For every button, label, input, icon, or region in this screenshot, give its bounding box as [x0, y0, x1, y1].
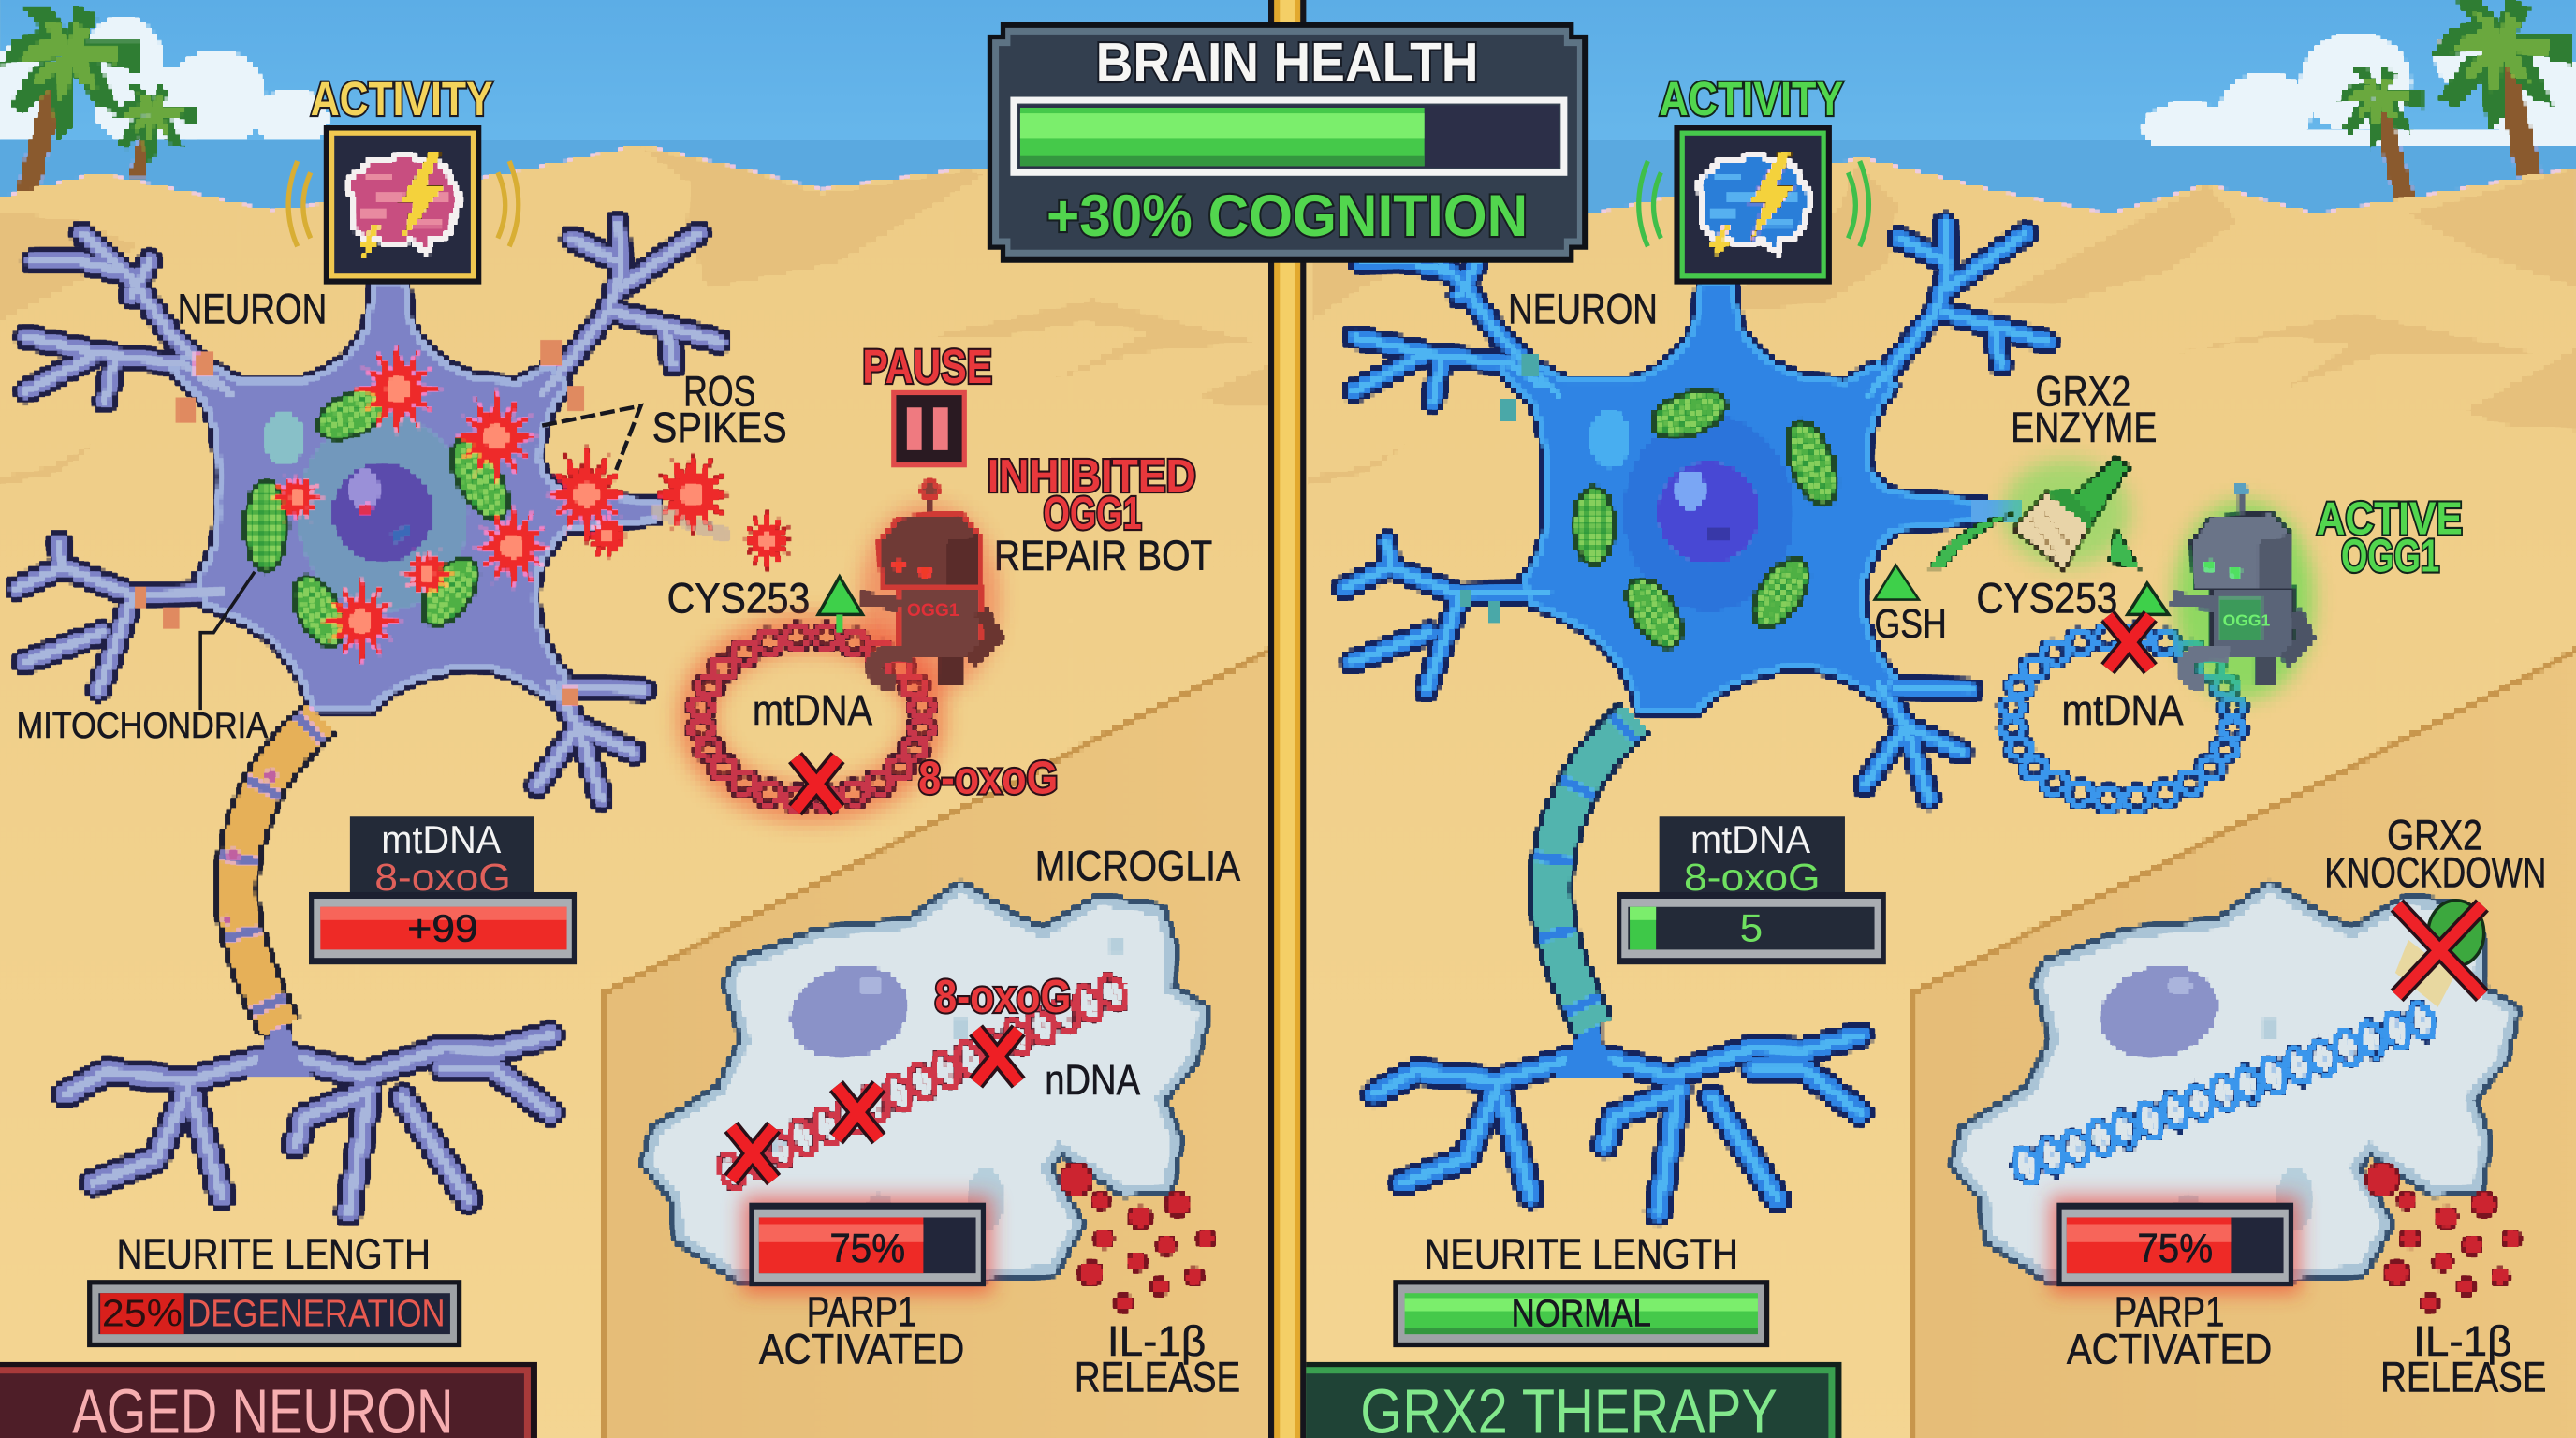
label: 8-oxoG aged mtDNA: 8-oxoG: [918, 754, 1058, 804]
mtDNA ring: therapy: [2000, 625, 2245, 811]
icon: activity aged: [288, 72, 519, 281]
mtDNA ring: aged: [690, 625, 933, 811]
waves therapy: [1639, 161, 1868, 246]
label and bar: neurite length aged: DEGENERATION: [187, 1291, 446, 1334]
spines therapy: [1459, 353, 1540, 621]
chest label: OGG1 therapy: OGG1: [2223, 611, 2271, 630]
DNA strand: nDNA therapy: [2008, 1000, 2440, 1187]
label: repair bot: REPAIR BOT: [994, 532, 1212, 580]
label: active OGG1: OGG1: [2341, 532, 2439, 582]
icon: GSH triangle and label: GSH: [1875, 601, 1947, 647]
mtDNA panel: therapy: mtDNA: [1690, 817, 1810, 861]
palm trees right: [2336, 0, 2571, 207]
label: GRX2 enzyme: [2011, 367, 2157, 451]
brain blue with bolt: [1699, 151, 1809, 259]
label: PARP1 aged: ACTIVATED: [759, 1326, 964, 1373]
label: mtDNA aged: mtDNA: [753, 686, 872, 734]
label and bar: neurite length therapy: NORMAL: [1512, 1291, 1651, 1334]
palm trees left: [0, 5, 196, 191]
damage marks: X on nDNA: [731, 1030, 1018, 1180]
header panel: brain health: [988, 22, 1588, 263]
label: mitochondria: [17, 572, 268, 746]
neuron: aged: [17, 224, 795, 1212]
chest label: OGG1 aged: OGG1: [907, 601, 959, 621]
label: 8-oxoG microglia: 8-oxoG: [935, 972, 1071, 1022]
label: IL-1 beta therapy: IL-1β: [2413, 1317, 2511, 1365]
label: IL-1 beta aged: RELEASE: [1075, 1354, 1240, 1401]
pause icon and label: [862, 340, 992, 465]
mtDNA panel: aged: +99: [407, 907, 478, 950]
label: mitochondria: MITOCHONDRIA: [17, 706, 268, 746]
microglia cell: therapy: [1958, 888, 2511, 1275]
bar: PARP1 therapy: [2050, 1196, 2300, 1293]
nucleus therapy: [1658, 462, 1760, 564]
bar: PARP1 therapy: 75%: [2137, 1225, 2213, 1271]
label: nDNA: nDNA: [1045, 1056, 1141, 1104]
green triangle: cys253 therapy: [2128, 583, 2169, 614]
heading: brain health: BRAIN HEALTH: [1096, 31, 1479, 94]
label: inhibited OGG1: OGG1: [1044, 489, 1142, 539]
label: inhibited OGG1: INHIBITED: [988, 451, 1196, 502]
dune shading: [0, 148, 2576, 486]
brain health bar: [1014, 100, 1564, 172]
sky background: [0, 0, 2576, 222]
center divider: [1268, 0, 1306, 1438]
label and bar: neurite length aged: 25%: [102, 1291, 183, 1334]
mtDNA panel: therapy: [1617, 816, 1886, 964]
label: IL-1 beta therapy: RELEASE: [2380, 1354, 2546, 1401]
label and bar: neurite length therapy: [1393, 1230, 1769, 1347]
nucleus: [332, 462, 433, 564]
clouds left: [0, 17, 329, 151]
mtDNA panel: aged: 8-oxoG: [374, 856, 511, 899]
label: PARP1 therapy: ACTIVATED: [2067, 1326, 2272, 1373]
mtDNA panel: aged: mtDNA: [381, 817, 501, 861]
label: ROS spikes: SPIKES: [652, 404, 787, 451]
label: neuron aged: NEURON: [178, 286, 327, 333]
label: IL-1 beta aged: [1075, 1317, 1240, 1401]
label: CYS253 aged: CYS253: [667, 575, 810, 623]
axon: therapy myelin: [1551, 718, 1634, 1027]
ROS spikes: [271, 341, 795, 666]
label: GRX2 enzyme: ENZYME: [2011, 404, 2157, 451]
bar: PARP1 aged: [742, 1196, 992, 1293]
panel: microglia background right: [1914, 647, 2576, 1438]
banner: aged neuron: [0, 1362, 537, 1438]
soma interior therapy: [1590, 409, 1794, 611]
label: mtDNA therapy: mtDNA: [2062, 686, 2184, 734]
soma interior: [265, 413, 468, 611]
brain pink with bolt: [348, 151, 460, 259]
waves: [288, 161, 519, 246]
label: GRX2 knockdown: GRX2: [2387, 811, 2482, 858]
green triangle: cys253 aged: [818, 577, 862, 633]
label: ROS spikes: ROS: [683, 367, 755, 415]
label: PARP1 aged: [759, 1287, 964, 1373]
nucleus microglia: [779, 952, 920, 1072]
label: active OGG1: [2317, 493, 2463, 582]
bar: PARP1 aged: 75%: [829, 1225, 905, 1271]
label: IL-1 beta aged: IL-1β: [1107, 1317, 1206, 1365]
mtDNA panel: aged: [309, 816, 577, 964]
icon: activity therapy: [1639, 72, 1868, 281]
pause icon and label: PAUSE: [862, 340, 992, 393]
IL-1 beta particles therapy: [2366, 1164, 2520, 1312]
label: activity aged: ACTIVITY: [311, 72, 493, 125]
label: ROS spikes: [542, 367, 787, 470]
label: activity therapy: ACTIVITY: [1660, 72, 1843, 125]
label: CYS253 therapy: CYS253: [1976, 575, 2117, 623]
panel: microglia background left: [605, 651, 1298, 1438]
label: active OGG1: ACTIVE: [2317, 493, 2463, 544]
icon: GSH triangle and label: [1875, 565, 1947, 647]
mtDNA panel: therapy: 8-oxoG: [1684, 856, 1821, 899]
spines: [135, 342, 583, 707]
label: PARP1 therapy: PARP1: [2115, 1287, 2224, 1335]
label: PARP1 therapy: [2067, 1287, 2272, 1373]
icon: broom enzyme: [1930, 459, 2139, 568]
aged process fading: [657, 511, 723, 534]
DNA strand: nDNA aged: [712, 971, 1133, 1193]
label: inhibited OGG1: [988, 451, 1196, 539]
stat: cognition: +30% COGNITION: [1046, 183, 1528, 249]
label: neuron therapy: NEURON: [1508, 286, 1658, 333]
icon: knocked-down broom with X: [2395, 901, 2484, 1007]
label: PARP1 aged: PARP1: [807, 1287, 916, 1335]
damage mark: X aged mtDNA: [795, 757, 838, 810]
label and bar: neurite length aged: NEURITE LENGTH: [117, 1230, 431, 1278]
label and bar: neurite length therapy: NEURITE LENGTH: [1425, 1230, 1738, 1278]
label and bar: neurite length aged: [87, 1230, 461, 1347]
damage mark: X therapy mtDNA: [2108, 616, 2150, 668]
robot: inhibited OGG1: [861, 481, 999, 695]
label: microglia: MICROGLIA: [1035, 843, 1241, 890]
robot: active OGG1: [2172, 483, 2313, 698]
microglia cell: aged: [649, 888, 1203, 1275]
mtDNA panel: therapy: 5: [1740, 906, 1763, 950]
nucleus microglia therapy: [2088, 952, 2230, 1072]
IL-1 beta particles aged: [1061, 1164, 1214, 1312]
label: IL-1 beta therapy: [2380, 1317, 2546, 1401]
mitochondria: therapy: [1570, 377, 1851, 660]
label: GRX2 knockdown: [2324, 811, 2546, 897]
axon: aged myelin: [222, 718, 320, 1027]
neuron: therapy: [1344, 224, 2047, 1212]
mitochondria: aged: [242, 375, 523, 659]
label: GRX2 enzyme: GRX2: [2036, 367, 2130, 415]
clouds right: [2140, 34, 2576, 146]
sea band: [0, 139, 2576, 238]
